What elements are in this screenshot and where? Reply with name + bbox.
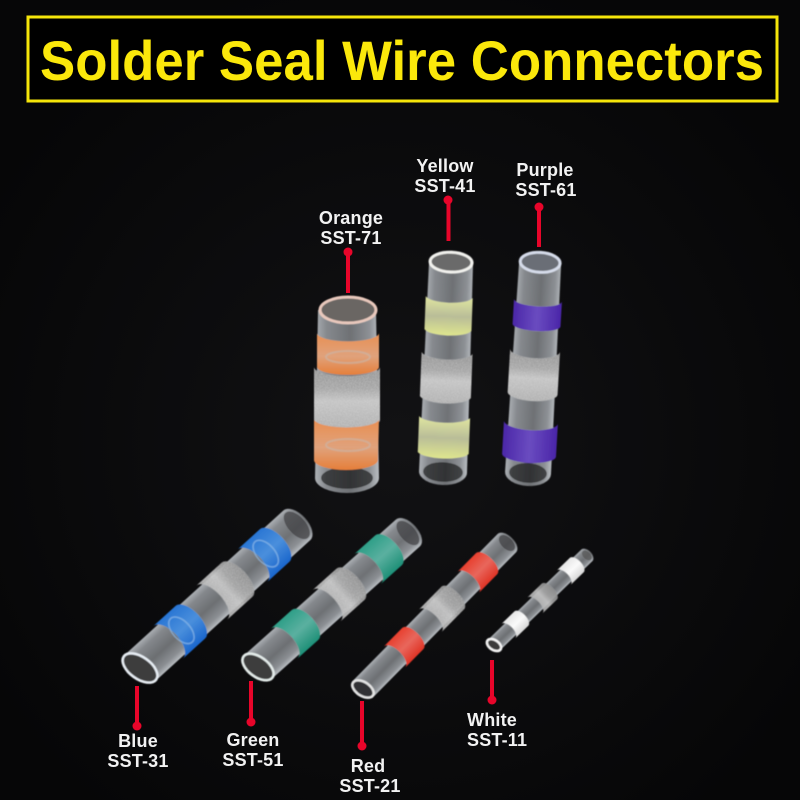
label: blue: Blue — [118, 731, 158, 751]
label: blue — [107, 686, 169, 771]
label: green — [222, 681, 284, 770]
label: orange — [319, 208, 383, 293]
label: yellow: SST-41 — [414, 176, 476, 196]
title box — [28, 17, 777, 101]
label: green: Green — [226, 730, 280, 750]
label: white — [467, 660, 527, 750]
label: purple: SST-61 — [515, 180, 577, 200]
pointer: white — [488, 660, 496, 704]
label: white: White — [467, 710, 517, 730]
connector: white SST-11 — [482, 544, 598, 657]
label: white: SST-11 — [467, 730, 527, 750]
connector: orange SST-71 — [314, 297, 380, 493]
pointer: green — [246, 681, 256, 726]
label: yellow: Yellow — [416, 156, 474, 176]
label: blue: SST-31 — [107, 751, 169, 771]
label: purple: Purple — [516, 160, 574, 180]
connector: green SST-51 — [234, 511, 429, 692]
connector: purple SST-61 — [500, 251, 568, 488]
label: red — [339, 701, 401, 796]
connector: red SST-21 — [345, 527, 523, 707]
label: orange: Orange — [319, 208, 383, 228]
pointer: yellow — [444, 196, 452, 241]
label: purple — [515, 160, 577, 247]
pointer: purple — [534, 202, 544, 247]
pointer: red — [358, 701, 366, 750]
label: green: SST-51 — [222, 750, 284, 770]
connector: yellow SST-41 — [417, 251, 476, 486]
title: Solder Seal Wire Connectors — [40, 29, 764, 92]
connector: blue SST-31 — [113, 501, 320, 695]
pointer: blue — [132, 686, 142, 730]
pointer: orange — [344, 248, 352, 293]
label: red: Red — [351, 756, 385, 776]
label: orange: SST-71 — [320, 228, 382, 248]
label: yellow — [414, 156, 476, 241]
label: red: SST-21 — [339, 776, 401, 796]
